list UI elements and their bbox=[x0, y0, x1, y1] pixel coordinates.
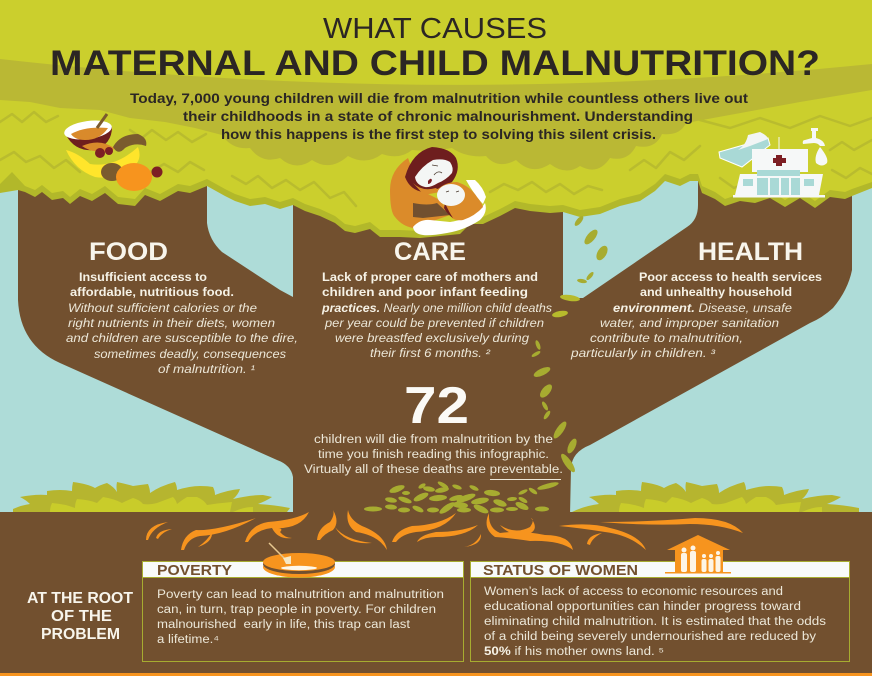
ground bbox=[0, 512, 872, 673]
food column bbox=[66, 238, 298, 376]
statistic: 72 children: children will die from malnutrition by the bbox=[314, 434, 553, 446]
icon: house with family bbox=[665, 535, 731, 574]
icon: hospital, tissue box and tap bbox=[719, 128, 827, 198]
panel: status of women: 50% if his mother owns land. ⁵ bbox=[484, 646, 664, 658]
care column: per year could be prevented if children bbox=[324, 318, 544, 330]
label: at the root of the problem: OF THE bbox=[51, 608, 112, 625]
care column: were breastfed exclusively during bbox=[335, 333, 530, 345]
care column: Lack of proper care of mothers and bbox=[322, 272, 538, 284]
canopy: outer leaf fringe bbox=[0, 0, 872, 238]
statistic: 72 children: time you finish reading this infographic. bbox=[318, 449, 549, 461]
statistic: 72 children: 72 bbox=[404, 377, 469, 435]
food column: of malnutrition. ¹ bbox=[158, 364, 255, 376]
heading: WHAT CAUSES bbox=[323, 13, 547, 45]
panel: status of women: STATUS OF WOMEN bbox=[483, 562, 638, 579]
panel: poverty: malnourished early in life, this trap can last bbox=[157, 619, 411, 631]
ground orange edge bbox=[0, 673, 872, 676]
canopy: dark upper band bbox=[0, 59, 872, 171]
food column: FOOD bbox=[89, 238, 168, 266]
panel: poverty: Poverty can lead to malnutrition and malnutrition bbox=[157, 589, 444, 601]
care column: CARE bbox=[394, 238, 466, 266]
panel: status of women: eliminating child malnutrition. It is estimated that the odds bbox=[484, 616, 826, 628]
intro text: how this happens is the first step to solving this silent crisis. bbox=[221, 127, 656, 142]
intro text: their childhoods in a state of chronic malnourishment. Understanding bbox=[183, 109, 693, 124]
ground grass: left bbox=[13, 482, 290, 512]
food column: Insufficient access to bbox=[79, 272, 207, 284]
health column: contribute to malnutrition, bbox=[590, 333, 743, 345]
statistic: 72 children: Virtually all of these deaths are preventable. bbox=[304, 464, 563, 476]
health column: particularly in children. ³ bbox=[570, 348, 716, 360]
health column: HEALTH bbox=[698, 238, 803, 266]
food column: affordable, nutritious food. bbox=[70, 287, 234, 299]
icon: plate and fork bbox=[263, 543, 335, 578]
canopy: bright leaf layer bbox=[0, 0, 872, 231]
health column: environment. Disease, unsafe bbox=[613, 303, 792, 315]
food column: sometimes deadly, consequences bbox=[94, 349, 286, 361]
care column: children and poor infant feeding bbox=[322, 287, 528, 299]
panel: status of women: Women’s lack of access to economic resources and bbox=[484, 586, 783, 598]
label: at the root of the problem: PROBLEM bbox=[41, 626, 120, 643]
canopy: leaf tip rows bbox=[0, 112, 872, 206]
panel: poverty: a lifetime.⁴ bbox=[157, 634, 219, 646]
intro text bbox=[130, 91, 749, 142]
statistic: 72 children bbox=[304, 377, 563, 480]
care column bbox=[321, 238, 552, 360]
label: at the root of the problem: AT THE ROOT bbox=[27, 590, 134, 607]
panel: status of women bbox=[470, 562, 850, 662]
health column: and unhealthy household bbox=[640, 287, 792, 299]
intro text: Today, 7,000 young children will die from malnutrition while countless others live out bbox=[130, 91, 749, 106]
health column: Poor access to health services bbox=[639, 272, 822, 284]
food column: and children are susceptible to the dire, bbox=[66, 333, 298, 345]
icon: food bbox=[63, 114, 163, 191]
heading bbox=[50, 13, 820, 83]
care column: practices. Nearly one million child deaths bbox=[321, 303, 552, 315]
health column: water, and improper sanitation bbox=[600, 318, 779, 330]
label: at the root of the problem bbox=[27, 590, 134, 643]
leaf pile bbox=[364, 480, 549, 516]
panel: status of women: educational opportunities can hinder progress toward bbox=[484, 601, 801, 613]
food column: right nutrients in their diets, women bbox=[68, 318, 275, 330]
food column: Without sufficient calories or the bbox=[68, 303, 257, 315]
panel: poverty bbox=[142, 562, 464, 662]
heading: MATERNAL AND CHILD MALNUTRITION? bbox=[50, 44, 820, 83]
panel: status of women: of a child being severely undernourished are reduced by bbox=[484, 631, 816, 643]
care column: their first 6 months. ² bbox=[370, 348, 491, 360]
panel: poverty: POVERTY bbox=[157, 562, 232, 579]
roots bbox=[146, 510, 743, 550]
falling leaves bbox=[518, 215, 610, 496]
health column bbox=[570, 238, 822, 360]
icon: mother and child bbox=[390, 147, 486, 235]
panel: poverty: can, in turn, trap people in poverty. For children bbox=[157, 604, 436, 616]
tree trunk and branches bbox=[18, 170, 852, 515]
ground grass: right bbox=[572, 482, 859, 512]
